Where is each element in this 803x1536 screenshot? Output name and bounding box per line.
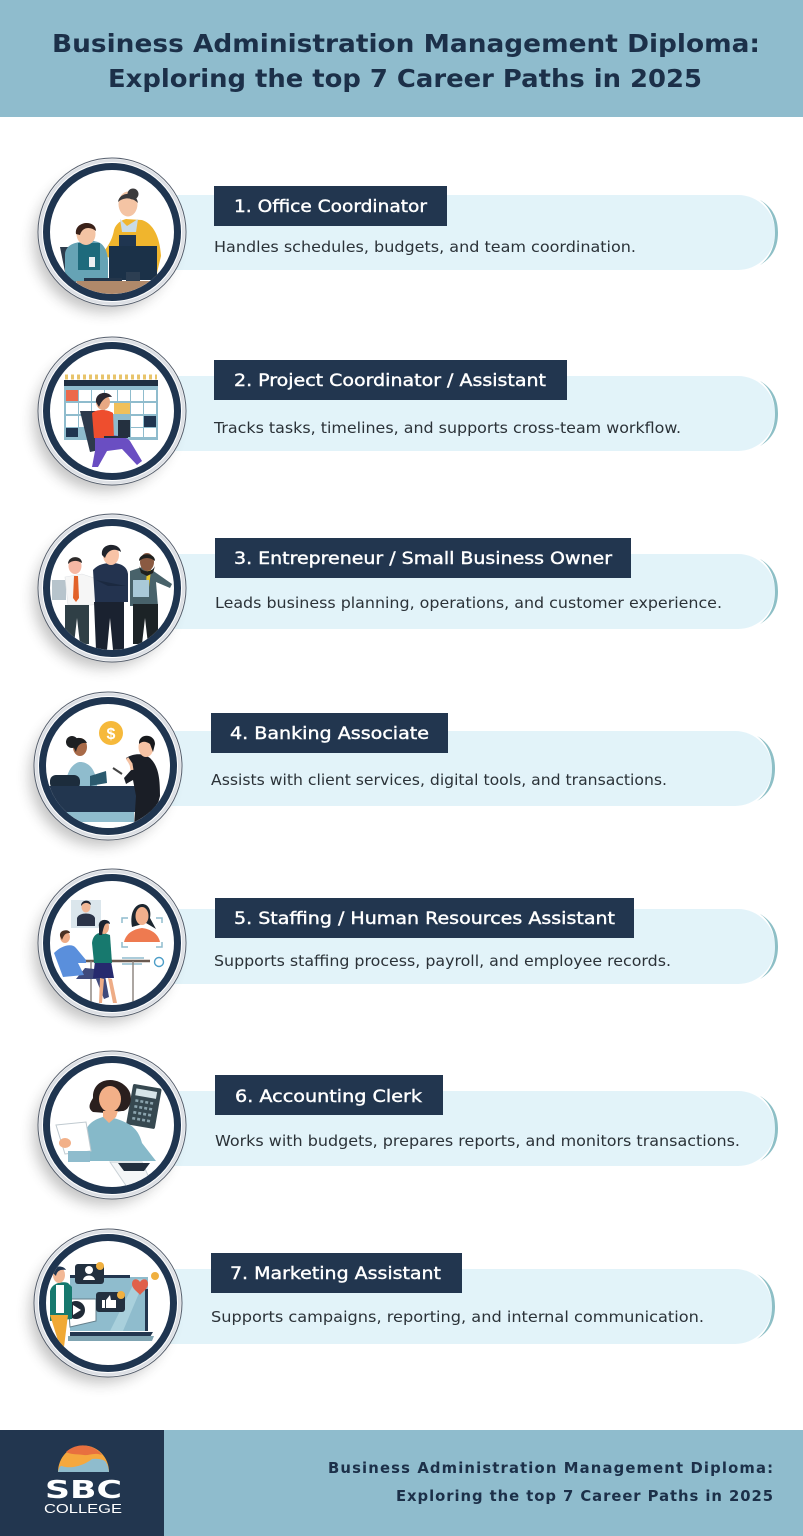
logo mark <box>58 1445 109 1472</box>
label 4: 4. Banking Associate <box>230 724 429 744</box>
logo text: SBC <box>45 1475 122 1504</box>
description 3: Leads business planning, operations, and customer experience. <box>215 594 722 612</box>
band 6 <box>100 1091 778 1166</box>
band 7 <box>97 1269 775 1344</box>
header banner <box>0 0 803 117</box>
icon: entrepreneur <box>34 514 186 668</box>
icon: banking associate: $ <box>107 726 116 743</box>
label 5 <box>215 898 634 938</box>
label 1 <box>214 186 447 226</box>
panel: career 6 <box>34 1051 778 1205</box>
description 5: Supports staffing process, payroll, and employee records. <box>214 952 671 970</box>
description 6: Works with budgets, prepares reports, and monitors transactions. <box>215 1132 740 1150</box>
logo text <box>44 1475 122 1516</box>
panel: career 2 <box>34 337 778 491</box>
label 3: 3. Entrepreneur / Small Business Owner <box>234 549 613 569</box>
panel: career 4 <box>30 692 775 846</box>
title: Business Administration Management Diploma: <box>52 29 760 58</box>
icon: office coordinator <box>34 158 186 312</box>
label 7 <box>211 1253 462 1293</box>
label 2 <box>214 360 567 400</box>
label 4 <box>211 713 448 753</box>
footer <box>0 1430 803 1536</box>
band 4 <box>97 731 775 806</box>
icon: marketing assistant <box>30 1229 182 1383</box>
icon: project coordinator <box>34 337 186 491</box>
label 6 <box>215 1075 443 1115</box>
label 6: 6. Accounting Clerk <box>235 1087 422 1107</box>
description 1: Handles schedules, budgets, and team coordination. <box>214 238 636 256</box>
title: Exploring the top 7 Career Paths in 2025 <box>108 64 702 93</box>
footer title <box>328 1460 773 1505</box>
description 2: Tracks tasks, timelines, and supports cross-team workflow. <box>213 419 681 437</box>
band 2 <box>100 376 778 451</box>
description 7: Supports campaigns, reporting, and internal communication. <box>211 1308 704 1326</box>
panel: career 1 <box>34 158 778 312</box>
panel: career 5 <box>34 869 778 1023</box>
band 1 <box>100 195 778 270</box>
label 3 <box>215 538 631 578</box>
label 5: 5. Staffing / Human Resources Assistant <box>234 909 615 929</box>
description 4: Assists with client services, digital tools, and transactions. <box>211 771 667 789</box>
band 3 <box>100 554 778 629</box>
label 2: 2. Project Coordinator / Assistant <box>234 371 546 391</box>
label 7: 7. Marketing Assistant <box>230 1264 441 1284</box>
footer title: Business Administration Management Diploma: <box>328 1460 773 1477</box>
logo panel <box>0 1430 164 1536</box>
icon: banking associate <box>30 692 182 846</box>
icon: accounting clerk <box>34 1051 186 1205</box>
panel: career 3 <box>34 514 778 668</box>
title <box>52 29 760 93</box>
logo text: COLLEGE <box>44 1502 122 1516</box>
band 5 <box>100 909 778 984</box>
label 1: 1. Office Coordinator <box>234 197 428 217</box>
footer title: Exploring the top 7 Career Paths in 2025 <box>396 1488 773 1505</box>
panel: career 7 <box>30 1229 775 1383</box>
icon: staffing <box>34 869 186 1023</box>
